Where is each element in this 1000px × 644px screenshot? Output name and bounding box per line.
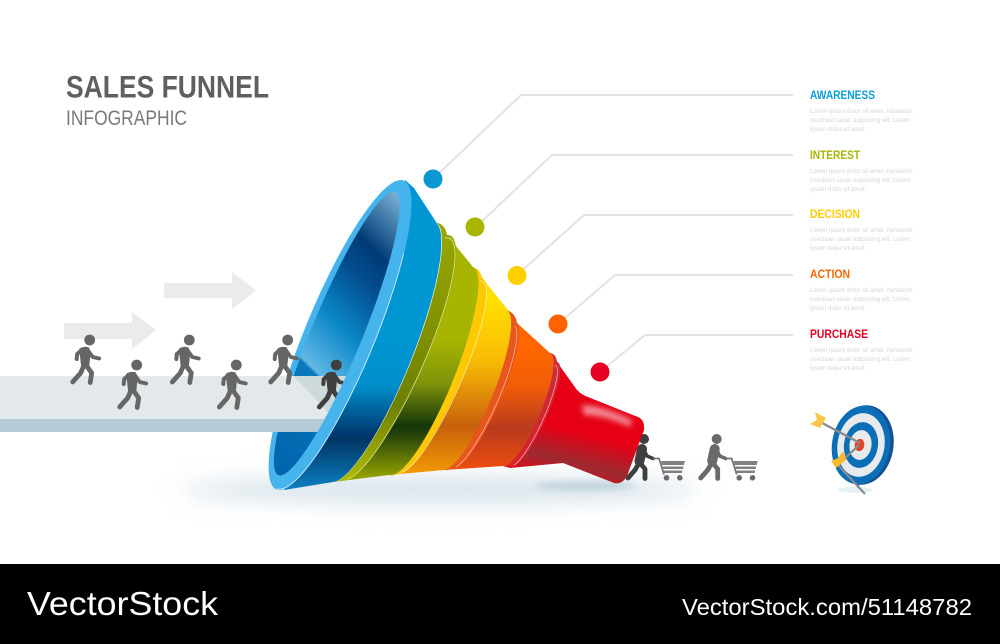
arrow: upper direction arrow xyxy=(164,272,256,309)
funnel band: green interest xyxy=(333,223,479,482)
stage label: purchase: ipsum dolor sit amet. xyxy=(810,365,867,372)
funnel band: red purchase with spout xyxy=(503,353,644,483)
stage label: action: ACTION xyxy=(810,269,850,281)
title: INFOGRAPHIC xyxy=(66,107,187,130)
stage label: decision: nsectiuet sauer adipiscing elit. Lorem xyxy=(810,236,910,243)
stage label: awareness: nsectiuet sauer adipiscing elit. Lorem xyxy=(810,117,910,124)
title: SALES FUNNEL xyxy=(66,68,269,104)
arrow: lower direction arrow xyxy=(64,312,156,349)
stage label: action: ipsum dolor sit amet. xyxy=(810,305,867,312)
stage label: interest: INTEREST xyxy=(810,150,860,162)
stage label: interest: nsectiuet sauer adipiscing elit. Lorem xyxy=(810,177,910,184)
footer bar: VectorStock xyxy=(27,585,219,622)
stage label: interest xyxy=(810,150,914,193)
stage label: action: nsectiuet sauer adipiscing elit. Lorem xyxy=(810,296,910,303)
stage label: interest: ipsum dolor sit amet. xyxy=(810,186,867,193)
funnel band: blue awareness body xyxy=(284,180,441,490)
stage label: interest: Lorem ipsum dolor sit amet, haradesh, xyxy=(810,168,914,175)
shopper entering funnel exit with cart xyxy=(628,434,685,481)
title xyxy=(66,68,269,130)
road entering funnel xyxy=(0,376,350,432)
stage label: purchase: Lorem ipsum dolor sit amet, haradesh, xyxy=(810,347,914,354)
stage label: decision: ipsum dolor sit amet. xyxy=(810,245,867,252)
stage dots xyxy=(424,170,610,382)
stage label: awareness xyxy=(810,90,914,133)
stage label: decision: Lorem ipsum dolor sit amet, haradesh, xyxy=(810,227,914,234)
stage label: action: Lorem ipsum dolor sit amet, haradesh, xyxy=(810,287,914,294)
front edge of funnel rim xyxy=(276,180,412,490)
funnel rim and interior xyxy=(244,167,436,503)
stage label: decision: DECISION xyxy=(810,209,860,221)
stage label: awareness: AWARENESS xyxy=(810,90,875,102)
leader lines xyxy=(433,95,793,372)
stage label: awareness: Lorem ipsum dolor sit amet, haradesh, xyxy=(810,108,914,115)
stage label: decision xyxy=(810,209,914,252)
shopper with cart xyxy=(701,434,758,481)
ground shadow xyxy=(180,477,700,503)
stage label: purchase: PURCHASE xyxy=(810,329,868,341)
funnel band: yellow decision xyxy=(389,267,513,475)
footer bar xyxy=(0,564,1000,644)
funnel band: orange action xyxy=(444,311,554,470)
walkers on the road xyxy=(73,335,346,408)
stage label: awareness: ipsum dolor sit amet. xyxy=(810,126,867,133)
stage label: purchase xyxy=(810,329,914,372)
stage label: action xyxy=(810,269,914,312)
target icon xyxy=(810,401,899,494)
footer bar: VectorStock.com/51148782 xyxy=(682,594,972,620)
stage label: purchase: nsectiuet sauer adipiscing elit. Lorem xyxy=(810,356,910,363)
funnel xyxy=(0,167,644,503)
